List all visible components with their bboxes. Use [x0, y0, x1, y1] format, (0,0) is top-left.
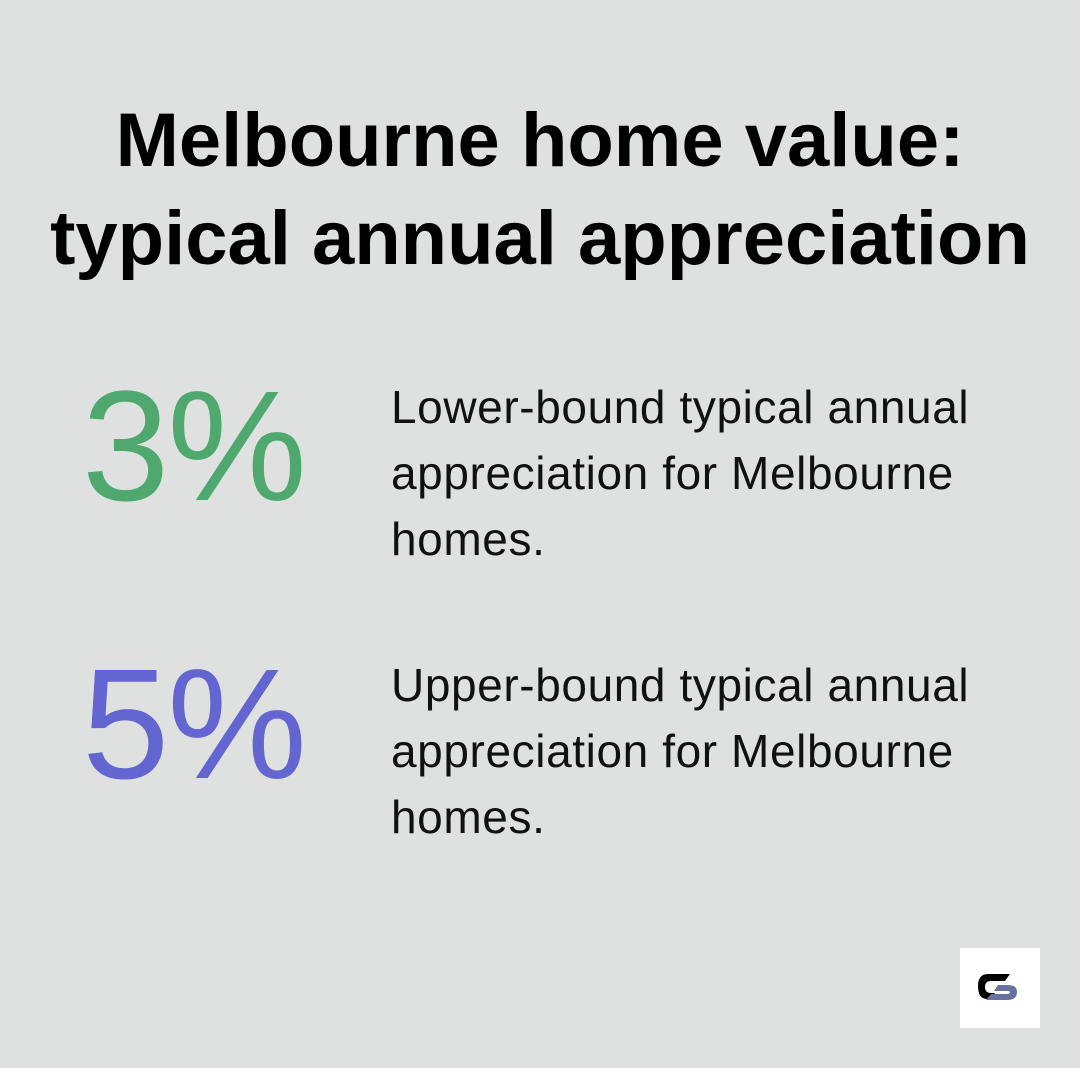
- text: upper bound: [391, 659, 969, 843]
- stat: 5%: 5%: [82, 637, 305, 812]
- text: lower bound: [391, 381, 969, 565]
- text: upper bound: Upper-bound typical annual: [391, 659, 969, 711]
- text: lower bound: appreciation for Melbourne: [391, 447, 954, 499]
- text: lower bound: Lower-bound typical annual: [391, 381, 969, 433]
- title: [50, 98, 1030, 281]
- logo: [960, 948, 1040, 1028]
- text: upper bound: homes.: [391, 791, 545, 843]
- title: Melbourne home value:: [116, 98, 964, 183]
- text: lower bound: homes.: [391, 513, 545, 565]
- title: typical annual appreciation: [50, 196, 1030, 281]
- stat: 3%: 3%: [82, 359, 305, 534]
- text: upper bound: appreciation for Melbourne: [391, 725, 954, 777]
